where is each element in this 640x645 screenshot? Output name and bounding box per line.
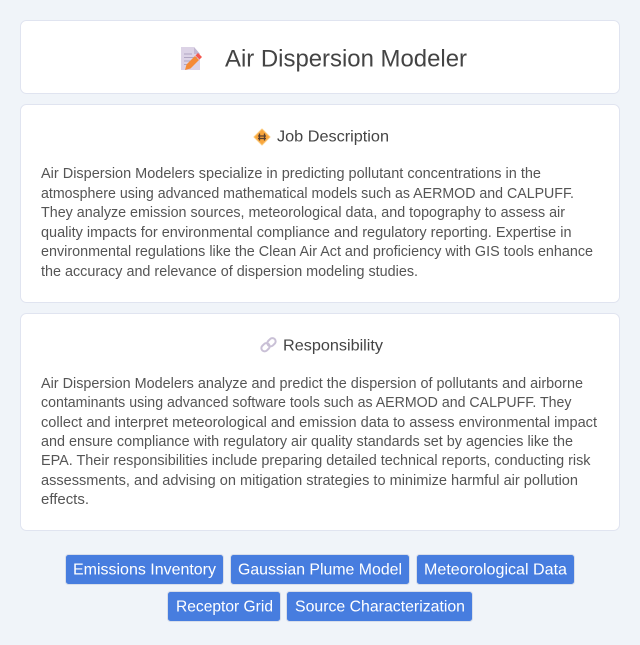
text block: job description: They analyze emission sources, meteorological data, and topography to assess air — [41, 205, 565, 221]
heading: job description: Job Description — [277, 128, 389, 146]
text block: job description: environmental regulations like the Clean Air Act and proficiency with GIS tools enhance — [41, 244, 593, 260]
text block: job description: the accuracy and relevance of dispersion modeling studies. — [41, 264, 418, 280]
heading: responsibility: Responsibility — [283, 338, 383, 354]
text block: job description: quality impacts for environmental compliance and regulatory reporting. Expertise in — [41, 225, 572, 241]
text block: job description: Air Dispersion Modelers specialize in predicting pollutant concentrations in the — [41, 166, 541, 182]
text block: responsibility: assessments, and advising on mitigation strategies to minimize harmful air pollution — [41, 473, 578, 489]
text block: responsibility: EPA. Their responsibilities include preparing detailed technical reports, conducting risk — [41, 453, 591, 469]
panel: responsibility — [20, 314, 620, 530]
icon: diamond road sign — [254, 129, 270, 145]
tag: Gaussian Plume Model — [230, 554, 410, 584]
text block: responsibility: contaminants using advanced software tools such as AERMOD and CALPUFF. They — [41, 395, 572, 411]
tag: Gaussian Plume Model: Gaussian Plume Model — [238, 562, 402, 578]
icon: chain link — [260, 337, 277, 353]
text block: job description: atmosphere using advanced mathematical models such as AERMOD and CALPUFF. — [41, 186, 574, 202]
tag: Meteorological Data: Meteorological Data — [424, 562, 567, 578]
text block: responsibility: collect and interpret meteorological and emission data to assess environmental impact — [41, 415, 597, 431]
title: Air Dispersion Modeler — [225, 46, 467, 72]
text block: job description — [41, 166, 593, 280]
panel: title header — [20, 20, 620, 94]
tag: Meteorological Data — [416, 554, 574, 584]
tag: Receptor Grid — [168, 592, 280, 622]
tag: Source Characterization — [286, 592, 472, 622]
tag: Receptor Grid: Receptor Grid — [176, 598, 273, 616]
panel: job description — [20, 104, 620, 302]
text block: responsibility: and ensure compliance with regulatory air quality standards set by agencies like the — [41, 434, 573, 450]
icon: document with pencil — [181, 47, 202, 70]
tag: Emissions Inventory: Emissions Inventory — [73, 562, 216, 578]
text block: responsibility: effects. — [41, 492, 89, 508]
text block: responsibility: Air Dispersion Modelers analyze and predict the dispersion of pollutants and airborne — [41, 376, 583, 392]
tag: Source Characterization: Source Characterization — [295, 598, 465, 616]
text block: responsibility — [41, 376, 597, 508]
tag: Emissions Inventory — [66, 554, 224, 584]
